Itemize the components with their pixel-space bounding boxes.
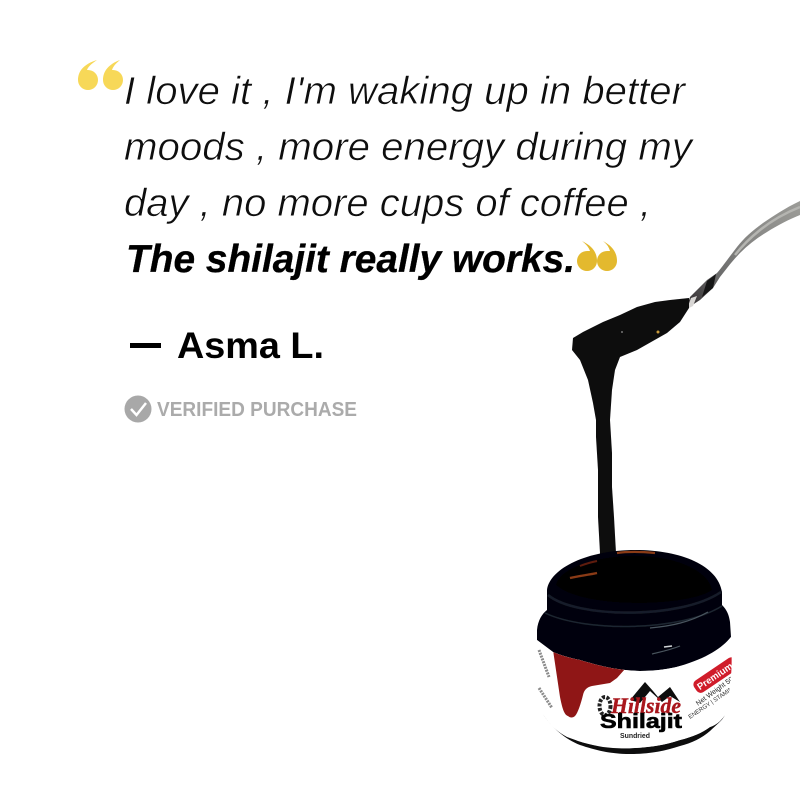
icon: logo wreath — [600, 697, 610, 715]
shilajit on spoon and falling stream — [572, 298, 689, 612]
jar label — [537, 637, 732, 748]
product jar — [537, 550, 732, 754]
quote text: moods , more energy during my — [124, 126, 695, 169]
jar lid and neck — [537, 550, 731, 671]
attribution: Asma L.: Asma L. — [177, 325, 324, 366]
brand name: Hillside — [610, 693, 681, 718]
testimonial infographic — [78, 60, 800, 754]
quote text — [124, 70, 695, 281]
product name: Shilajit — [600, 711, 682, 733]
side label small print — [539, 650, 552, 708]
verified purchase badge — [124, 396, 357, 422]
icon: closing quotation marks — [577, 241, 617, 271]
neck highlights — [548, 592, 721, 613]
net weight line: Net Weight 50 — [695, 676, 735, 708]
icon: mountains — [630, 682, 680, 703]
benefits line: ENERGY | STAMINA — [688, 684, 738, 721]
sundried note: Sundried — [620, 731, 650, 740]
bold quote conclusion: The shilajit really works. — [126, 238, 575, 281]
quote text: I love it , I'm waking up in better — [124, 70, 687, 113]
icon: opening quotation marks — [78, 60, 123, 90]
premium badge: Premium — [695, 661, 735, 693]
verified purchase badge: VERIFIED PURCHASE — [157, 399, 357, 421]
quote text: day , no more cups of coffee , — [124, 182, 651, 225]
jar opening with reddish residue — [556, 556, 712, 603]
red drip — [553, 650, 625, 718]
jar base — [543, 714, 725, 754]
spoon handle — [686, 201, 800, 309]
